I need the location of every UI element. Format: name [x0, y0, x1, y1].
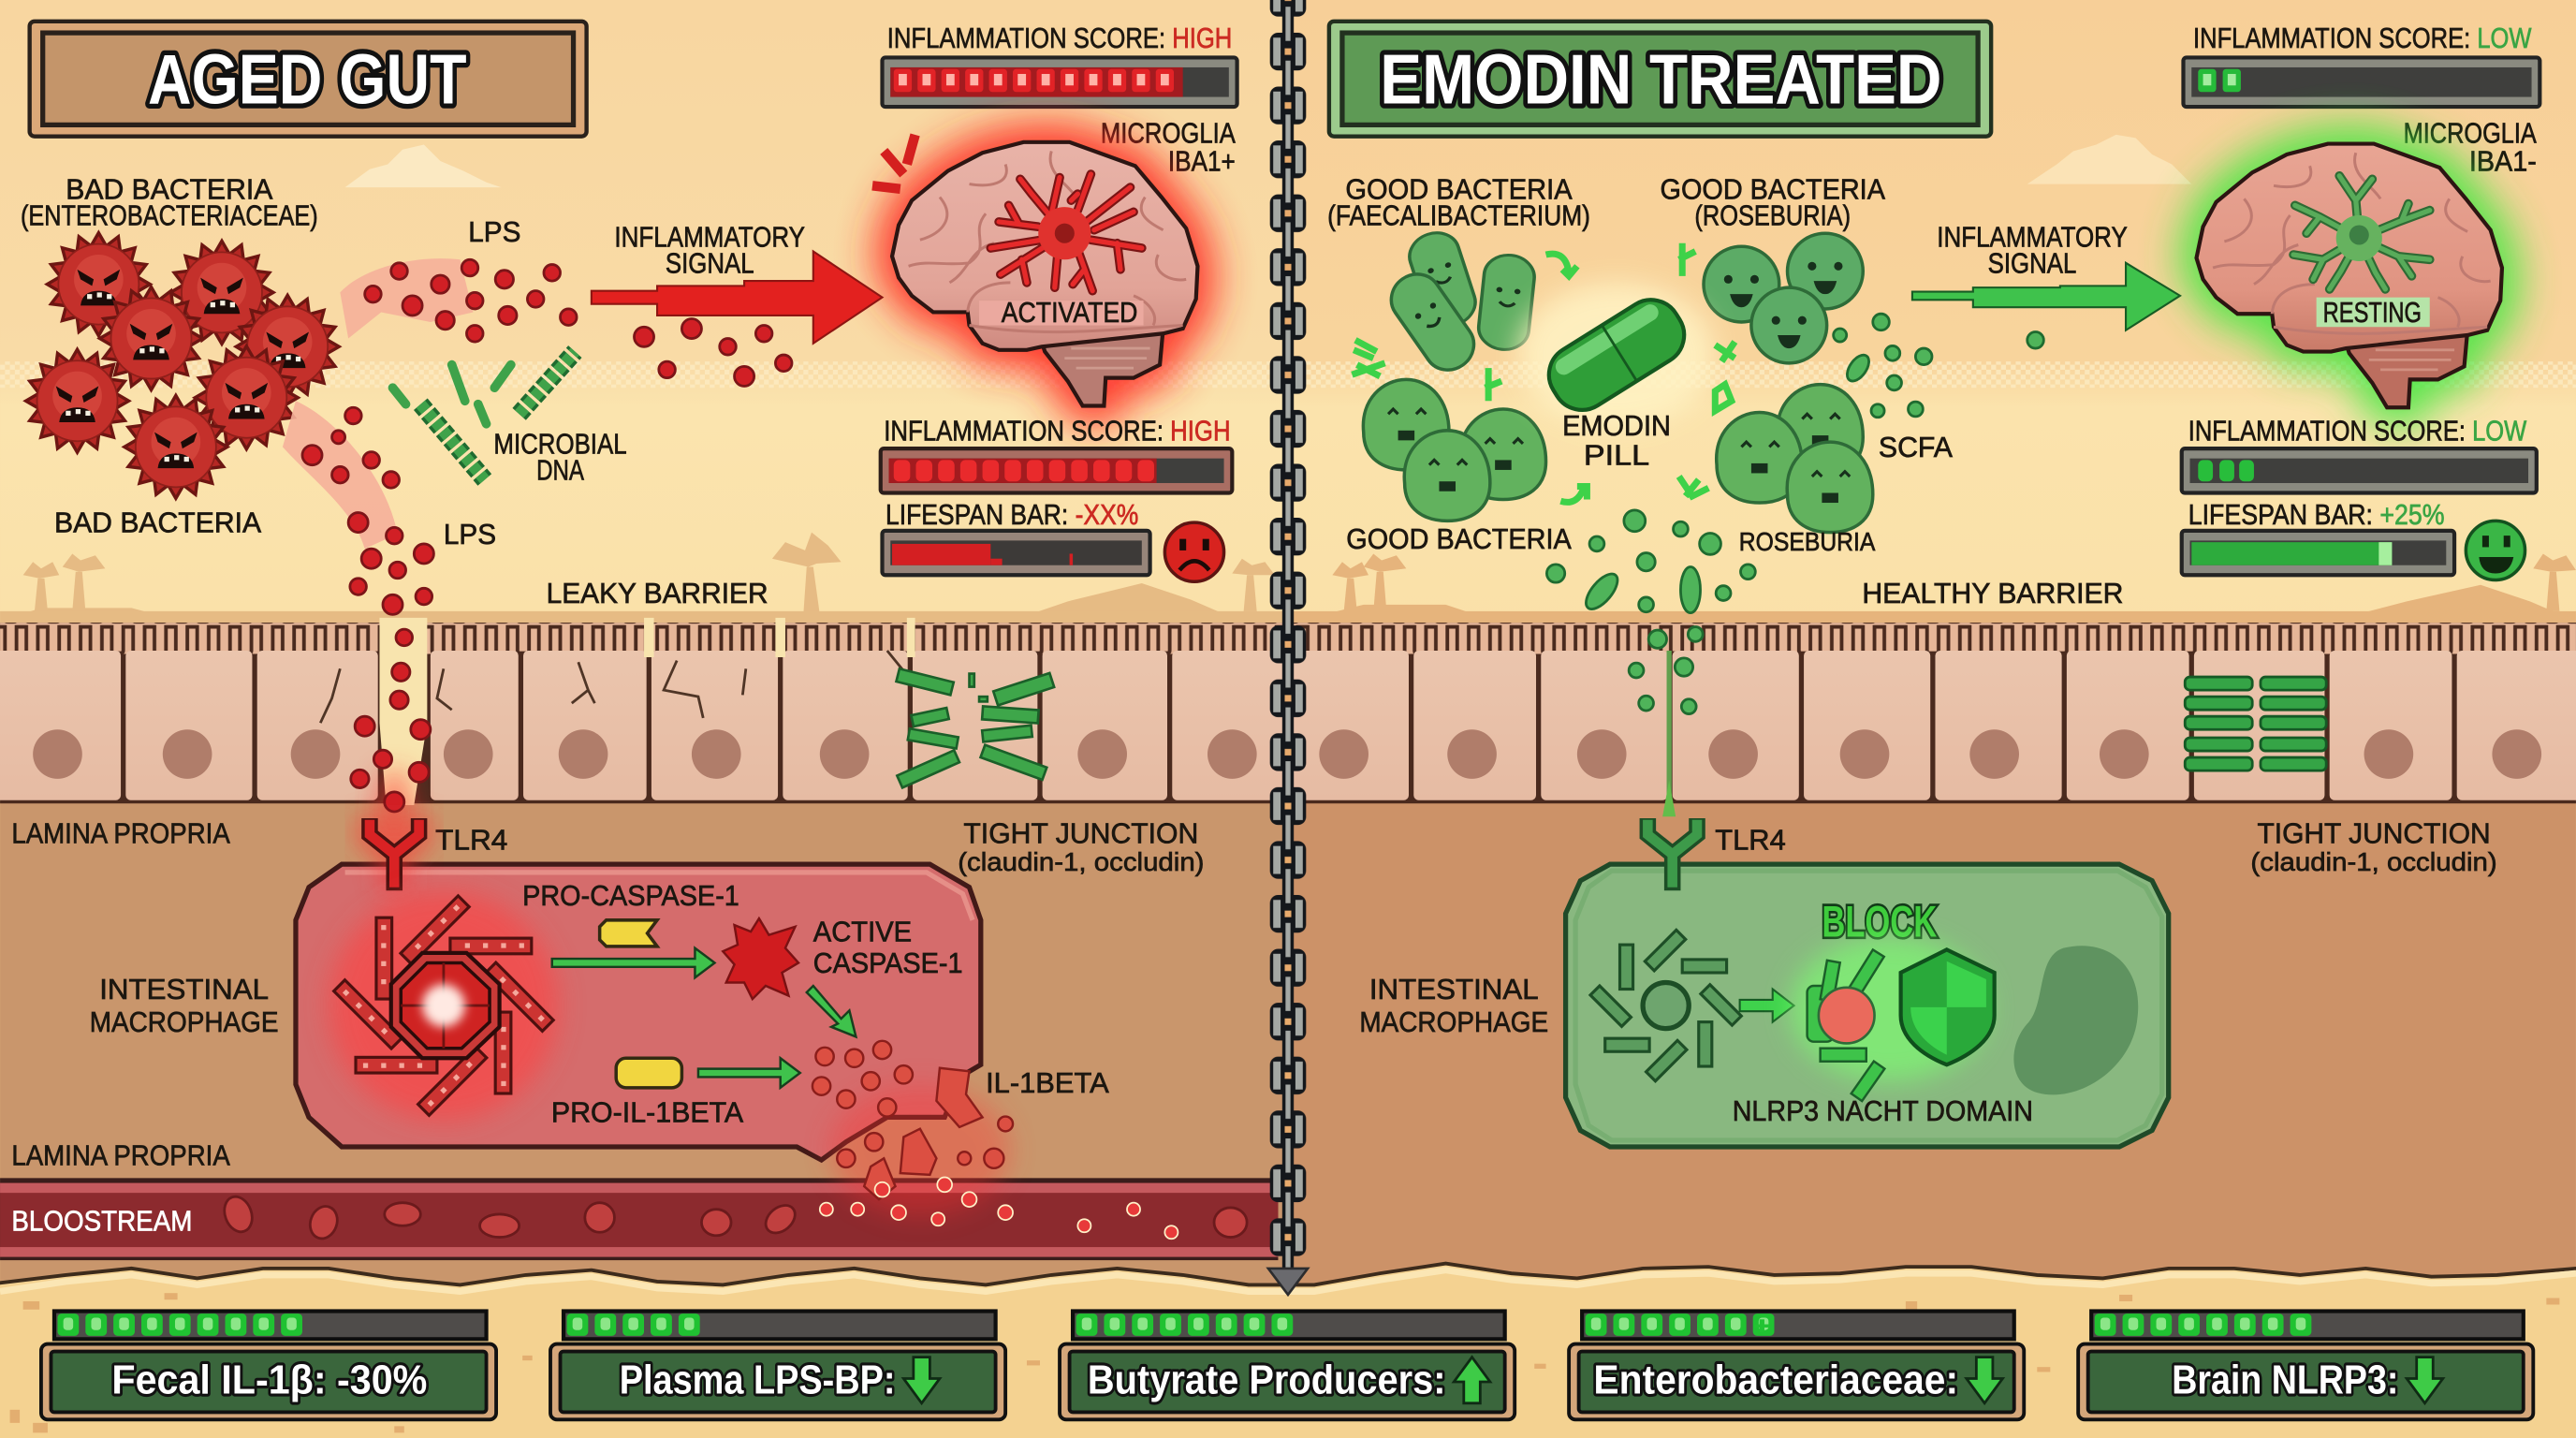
- cloud right: [2027, 135, 2191, 184]
- bad bacteria label top: (ENTEROBACTERIACEAE): [21, 198, 318, 231]
- active caspase-1 star: [723, 918, 798, 999]
- lifespan label aged: LIFESPAN BAR: -XX%: [886, 498, 1138, 531]
- bad bacteria cluster: [26, 233, 339, 498]
- tight junction broken, left: [896, 668, 1054, 787]
- NLRP3 NACHT domain label: NLRP3 NACHT DOMAIN: [1733, 1094, 2033, 1127]
- roseburia lower label: ROSEBURIA: [1739, 527, 1876, 556]
- good bacteria label faecalibacterium: (FAECALIBACTERIUM): [1327, 198, 1590, 231]
- microbial DNA label: MICROBIAL: [493, 427, 627, 460]
- microglia label, aged: [1101, 117, 1236, 178]
- lump bacteria lower right: [1717, 385, 1873, 533]
- arrow to blocked complex: [1740, 990, 1794, 1022]
- pro-caspase-1 label: PRO-CASPASE-1: [522, 879, 739, 912]
- SCFA particles: [1546, 314, 2043, 714]
- biomarker bar 3: [1073, 1312, 1505, 1339]
- NLRP3 inflammasome, active: [329, 890, 559, 1121]
- RESTING tag: RESTING: [2323, 296, 2422, 329]
- leaky barrier label: LEAKY BARRIER: [547, 577, 768, 609]
- good bacteria lower label: GOOD BACTERIA: [1346, 522, 1572, 555]
- inflammation bar 2 aged: [881, 448, 1232, 493]
- pro-caspase-1 yellow icon: [600, 920, 657, 946]
- bloodstream: [0, 1178, 1278, 1260]
- LPS plume upper: [340, 258, 474, 339]
- intestinal macrophage label treated: [1359, 973, 1548, 1038]
- TLR4 label treated: TLR4: [1715, 823, 1786, 856]
- tight junction label aged: TIGHT JUNCTION: [963, 816, 1198, 849]
- leak plume red glow: [374, 772, 414, 838]
- active caspase-1 label: [813, 916, 963, 979]
- title banner: emodin treated: EMODIN TREATED: [1380, 40, 1942, 119]
- bad bacteria label top: [21, 172, 318, 231]
- emodin pill label: PILL: [1584, 439, 1649, 472]
- BLOCK label: BLOCK: [1822, 897, 1937, 946]
- shield icon: [1901, 949, 1995, 1064]
- TLR4 receptor, green: [1647, 781, 1697, 890]
- happy face: [2466, 521, 2525, 580]
- arrow to IL-1beta: [807, 986, 856, 1036]
- inflammatory signal label, aged: INFLAMMATORY: [614, 220, 805, 253]
- LPS label upper: LPS: [468, 215, 520, 248]
- biomarker bar 2: [564, 1312, 996, 1339]
- microbial DNA label: DNA: [536, 453, 584, 486]
- biomarker panel 3: [1060, 1344, 1515, 1419]
- coccus bacteria cluster top: [1704, 233, 1863, 363]
- title banner: emodin treated: [1329, 22, 1991, 137]
- inflammation score label 2 aged: INFLAMMATION SCORE: HIGH: [884, 414, 1231, 447]
- macrophage inner rim: [345, 873, 973, 920]
- aged macrophage cell: [296, 864, 981, 1160]
- LPS particles through leak: [302, 407, 433, 812]
- green SCFA trace line through barrier: [1668, 651, 1671, 805]
- pro-IL-1beta yellow pill: [616, 1058, 681, 1088]
- lamina propria tissue, treated: [1288, 801, 2576, 1295]
- intestinal macrophage label aged: INTESTINAL: [99, 973, 269, 1005]
- rod bacteria cluster: [1382, 227, 1536, 379]
- lifespan bar treated: [2182, 531, 2454, 575]
- tight junction label aged: [958, 816, 1204, 876]
- title banner: aged gut: [30, 22, 587, 137]
- IL-1beta particles spilling to blood: [812, 1041, 1178, 1239]
- LPS particles upper: [365, 259, 792, 386]
- biomarker bar 1: [54, 1312, 487, 1339]
- inactive inflammasome ring: [1590, 930, 1741, 1081]
- active caspase-1 label: CASPASE-1: [813, 946, 963, 979]
- sky background, treated side: [1288, 0, 2576, 657]
- SCFA label: SCFA: [1879, 431, 1953, 463]
- TLR4 label aged: TLR4: [435, 823, 507, 856]
- sky background, aged side: [0, 0, 1288, 657]
- tight junction intact, right: [2185, 677, 2326, 770]
- biomarker bar 4: [1582, 1312, 2014, 1339]
- inflammation bar treated top: [2183, 57, 2539, 107]
- LPS plume lower: [283, 401, 398, 549]
- intestinal macrophage label treated: MACROPHAGE: [1359, 1005, 1548, 1038]
- microglia label treated: MICROGLIA: [2404, 117, 2537, 150]
- active caspase-1 label: ACTIVE: [813, 916, 912, 948]
- emodin pill label: EMODIN: [1562, 409, 1671, 442]
- lump bacteria lower left: [1363, 379, 1546, 521]
- biomarker panel 1: [41, 1344, 496, 1419]
- TLR4 receptor, red: [370, 818, 419, 890]
- bad bacteria label top: BAD BACTERIA: [66, 172, 273, 205]
- red inflammatory signal arrow: [592, 252, 883, 344]
- bad bacteria label lower: BAD BACTERIA: [54, 506, 262, 539]
- microglia label, aged: IBA1+: [1168, 145, 1236, 178]
- biomarker panel 5: [2078, 1344, 2533, 1419]
- tight junction label treated: (claudin-1, occludin): [2250, 847, 2497, 876]
- aged brain with activated microglia: [872, 135, 1197, 405]
- emodin pill: [1518, 283, 1715, 427]
- inflammation bar, aged top: [883, 57, 1237, 107]
- tight junction label treated: [2250, 816, 2497, 876]
- sand floor with wavy edge: [0, 1264, 2576, 1438]
- treated brain with resting microglia: [2197, 144, 2502, 407]
- microglia label treated: IBA1-: [2469, 145, 2537, 178]
- lamina propria tissue: [0, 801, 1288, 1295]
- microbial DNA label: [493, 427, 627, 486]
- inflammatory signal label treated: SIGNAL: [1988, 246, 2076, 279]
- biomarker panel 2: [550, 1344, 1005, 1419]
- LPS label lower: LPS: [444, 518, 496, 550]
- intestinal macrophage label aged: [90, 973, 279, 1038]
- good bacteria label roseburia: GOOD BACTERIA: [1661, 172, 1885, 205]
- epithelial barrier, aged side with leak: [0, 618, 1290, 805]
- treated right-side sky elements: inflammation score label: INFLAMMATION SCORE: LOW: [2193, 22, 2532, 54]
- microbial DNA fragments: [393, 352, 575, 479]
- biomarker bar 5: [2091, 1312, 2524, 1339]
- treated macrophage inner rim: [1575, 871, 2162, 1140]
- good bacteria label roseburia: [1661, 172, 1885, 231]
- macrophage nucleus blob: [2013, 946, 2138, 1094]
- arrow to IL-1beta cluster: [698, 1058, 800, 1088]
- tight junction label aged: (claudin-1, occludin): [958, 847, 1204, 876]
- inflammatory signal label, aged: [614, 220, 805, 279]
- cloud left: [345, 144, 501, 187]
- tight junction label treated: TIGHT JUNCTION: [2257, 816, 2491, 849]
- lamina propria label lower: LAMINA PROPRIA: [11, 1138, 230, 1171]
- inflammatory signal label, aged: SIGNAL: [666, 246, 754, 279]
- microglia label, aged: MICROGLIA: [1101, 117, 1236, 150]
- desert silhouettes, left: [0, 533, 1288, 624]
- arrow to active caspase: [552, 948, 714, 977]
- desert silhouettes, right: [1288, 553, 2576, 624]
- inflammatory signal label treated: [1937, 220, 2128, 279]
- green swirl arrows: [1352, 243, 1734, 502]
- good bacteria label faecalibacterium: [1327, 172, 1590, 231]
- blocked NACHT complex: [1791, 936, 1988, 1101]
- ACTIVATED tag: ACTIVATED: [1002, 296, 1137, 329]
- IL-1beta label: IL-1BETA: [986, 1066, 1109, 1099]
- dithered horizon band: [0, 361, 2576, 388]
- pro-IL-1beta label: PRO-IL-1BETA: [551, 1096, 744, 1129]
- lifespan label treated: LIFESPAN BAR: +25%: [2188, 498, 2445, 531]
- lifespan bar aged: [883, 531, 1150, 575]
- biomarker panel 2: Plasma LPS-BP:: [620, 1357, 896, 1402]
- intestinal macrophage label treated: INTESTINAL: [1369, 973, 1539, 1005]
- biomarker panel 5: Brain NLRP3:: [2172, 1357, 2398, 1402]
- biomarker panel 4: [1569, 1344, 2024, 1419]
- good bacteria label roseburia: (ROSEBURIA): [1694, 198, 1851, 231]
- healthy barrier label: HEALTHY BARRIER: [1862, 577, 2123, 609]
- biomarker panel 3: Butyrate Producers:: [1088, 1357, 1445, 1402]
- central chain divider: [1268, 0, 1308, 1295]
- good bacteria label faecalibacterium: GOOD BACTERIA: [1345, 172, 1573, 205]
- BLOODSTREAM label: BLOOSTREAM: [11, 1205, 192, 1238]
- sad face: [1164, 522, 1224, 581]
- microglia label treated: [2404, 117, 2537, 178]
- biomarker panel 4: Enterobacteriaceae:: [1593, 1357, 1958, 1402]
- inflammation score label, gut aged: INFLAMMATION SCORE: HIGH: [887, 22, 1232, 54]
- inflammatory signal label treated: INFLAMMATORY: [1937, 220, 2128, 253]
- inflammation score label 2 treated: INFLAMMATION SCORE: LOW: [2188, 414, 2526, 447]
- green signal arrow: [1912, 263, 2180, 330]
- inflammation bar 2 treated: [2182, 448, 2537, 493]
- emodin pill label: [1562, 409, 1671, 472]
- epithelial barrier, treated side: [1288, 623, 2576, 803]
- intestinal macrophage label aged: MACROPHAGE: [90, 1005, 279, 1038]
- treated macrophage cell: [1566, 864, 2169, 1147]
- title banner: aged gut: AGED GUT: [148, 40, 466, 119]
- lamina propria label upper, aged: LAMINA PROPRIA: [11, 816, 230, 849]
- biomarker panel 1: Fecal IL-1β: -30%: [111, 1357, 427, 1402]
